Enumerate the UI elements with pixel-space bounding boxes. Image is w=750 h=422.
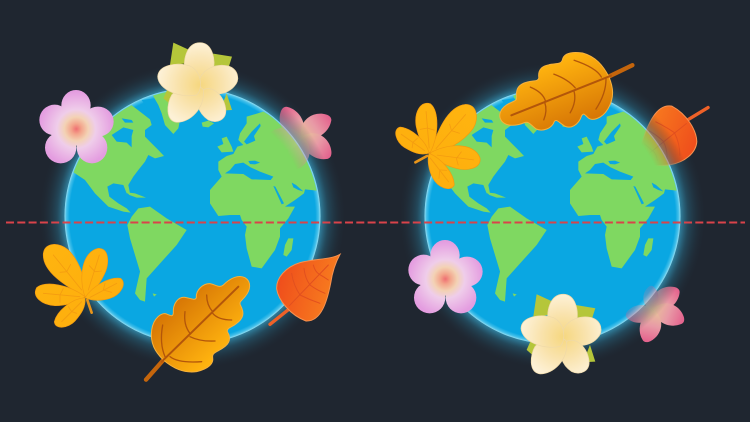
right globe: cream flower <box>521 294 601 374</box>
left globe: summer cream flower <box>158 43 238 122</box>
right globe: pink blossom <box>408 240 483 313</box>
left globe <box>38 62 346 370</box>
right globe: oak leaf <box>497 25 632 160</box>
right globe <box>398 62 706 370</box>
left globe: oak leaf <box>146 276 250 380</box>
right globe: chestnut leaf <box>391 95 488 196</box>
left globe: chestnut leaf <box>35 244 123 327</box>
equator dashed line <box>6 222 745 224</box>
left globe: faded pink flower <box>272 106 332 168</box>
left globe: pink blossom <box>39 90 114 163</box>
right globe: faded red leaf <box>642 105 710 166</box>
right globe: faded pink flower <box>626 286 684 342</box>
left globe: red leaf <box>270 254 340 324</box>
